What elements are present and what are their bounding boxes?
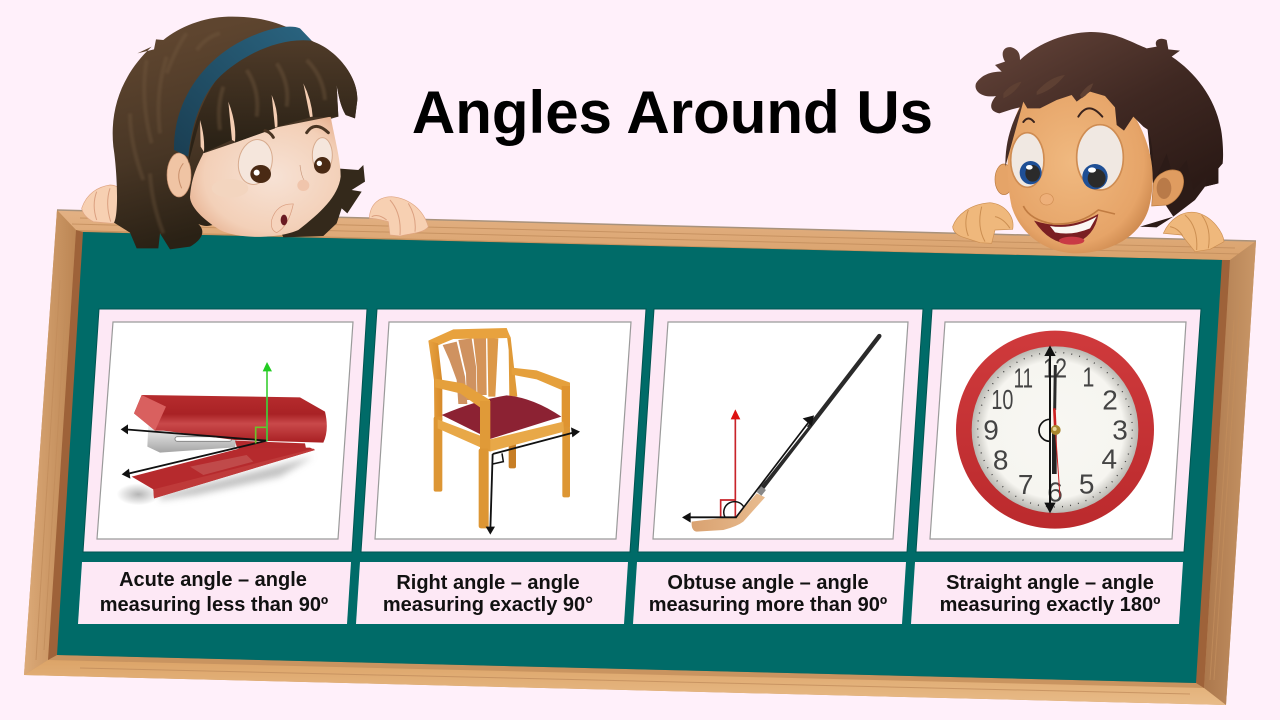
clock with straight-angle arrows: 6 bbox=[1047, 477, 1063, 508]
picture box bbox=[653, 322, 908, 539]
clock with straight-angle arrows: 3 bbox=[1112, 414, 1128, 445]
caption: straight angle bbox=[911, 562, 1183, 624]
boy face bbox=[1008, 88, 1153, 253]
boy mouth bbox=[1023, 206, 1115, 245]
clock with straight-angle arrows: 2 bbox=[1102, 384, 1118, 415]
caption: obtuse angle bbox=[633, 562, 906, 624]
caption: right angle: measuring exactly 90° bbox=[383, 594, 593, 616]
boy right ear bbox=[1152, 170, 1184, 206]
caption: straight angle: measuring exactly 180º bbox=[940, 594, 1160, 616]
wooden board frame bbox=[24, 210, 1256, 705]
girl cheek bbox=[212, 179, 248, 198]
boy hair bbox=[976, 32, 1223, 190]
girl bangs bbox=[188, 37, 357, 163]
caption: obtuse angle: Obtuse angle – angle bbox=[667, 572, 869, 594]
panel: right angle bbox=[361, 309, 646, 552]
card: clock bbox=[916, 309, 1201, 552]
clock with straight-angle arrows: 1 bbox=[1082, 362, 1094, 393]
hockey stick with angle arrows bbox=[682, 336, 879, 532]
panel: obtuse angle bbox=[638, 309, 923, 552]
girl hair spikes behind face bbox=[280, 165, 365, 237]
picture box bbox=[97, 322, 353, 539]
clock with straight-angle arrows: 4 bbox=[1102, 443, 1117, 474]
card: chair bbox=[361, 309, 646, 552]
stapler with angle arrows bbox=[117, 362, 327, 505]
caption: obtuse angle: measuring more than 90º bbox=[649, 594, 887, 616]
girl hair streaks bbox=[130, 33, 220, 233]
boy nose bbox=[1040, 194, 1053, 205]
straight arrows bbox=[1039, 345, 1056, 513]
chalkboard bbox=[57, 232, 1222, 683]
boy hair highlights bbox=[1003, 75, 1093, 98]
clock with straight-angle arrows: 10 bbox=[991, 384, 1013, 415]
girl nose bbox=[297, 165, 309, 191]
boy eyebrows bbox=[1023, 108, 1102, 122]
clock with straight-angle arrows bbox=[956, 331, 1154, 529]
clock with straight-angle arrows: 8 bbox=[993, 444, 1008, 475]
girl bang slits bbox=[200, 83, 313, 152]
acute arrows bbox=[121, 362, 272, 479]
girl left eye bbox=[234, 136, 276, 188]
boy left hand bbox=[953, 203, 1013, 243]
boy back hair bbox=[1140, 87, 1223, 227]
picture box bbox=[375, 322, 631, 539]
caption: right angle bbox=[356, 562, 628, 624]
caption: straight angle: Straight angle – angle bbox=[946, 572, 1154, 594]
character: boy bbox=[953, 32, 1224, 253]
clock with straight-angle arrows: 7 bbox=[1018, 469, 1033, 500]
card: stapler bbox=[83, 309, 367, 552]
title: Angles Around Us bbox=[412, 79, 933, 146]
chair with angle arrows bbox=[428, 328, 580, 535]
clock with straight-angle arrows: 5 bbox=[1079, 468, 1094, 499]
caption: acute angle bbox=[78, 562, 351, 624]
caption: acute angle: measuring less than 90º bbox=[100, 594, 328, 616]
girl mouth bbox=[271, 204, 293, 233]
boy left ear bbox=[995, 164, 1013, 195]
girl face bbox=[190, 117, 341, 237]
obtuse arrows bbox=[682, 409, 814, 523]
girl ear bbox=[167, 153, 191, 197]
girl left hand bbox=[82, 185, 124, 223]
panel: acute angle bbox=[83, 309, 367, 552]
girl eyebrows bbox=[265, 126, 328, 137]
girl hair bbox=[113, 17, 357, 249]
girl right hand bbox=[369, 197, 428, 236]
boy right hand bbox=[1163, 212, 1224, 252]
character: girl bbox=[82, 17, 428, 249]
picture box bbox=[930, 322, 1186, 539]
clock with straight-angle arrows: 11 bbox=[1014, 362, 1033, 393]
caption: right angle: Right angle – angle bbox=[396, 572, 580, 594]
panel: straight angle bbox=[916, 309, 1201, 552]
boy left eye bbox=[1011, 133, 1044, 187]
caption: acute angle: Acute angle – angle bbox=[119, 569, 307, 591]
clock with straight-angle arrows: 9 bbox=[983, 414, 999, 445]
boy right eye bbox=[1077, 125, 1123, 190]
girl bang streaks bbox=[219, 60, 325, 130]
girl right eye bbox=[312, 138, 332, 174]
clock with straight-angle arrows: 12 bbox=[1043, 352, 1067, 383]
right-angle arrows bbox=[486, 427, 580, 535]
girl headband bbox=[174, 27, 312, 157]
card: hockey stick bbox=[638, 309, 923, 552]
